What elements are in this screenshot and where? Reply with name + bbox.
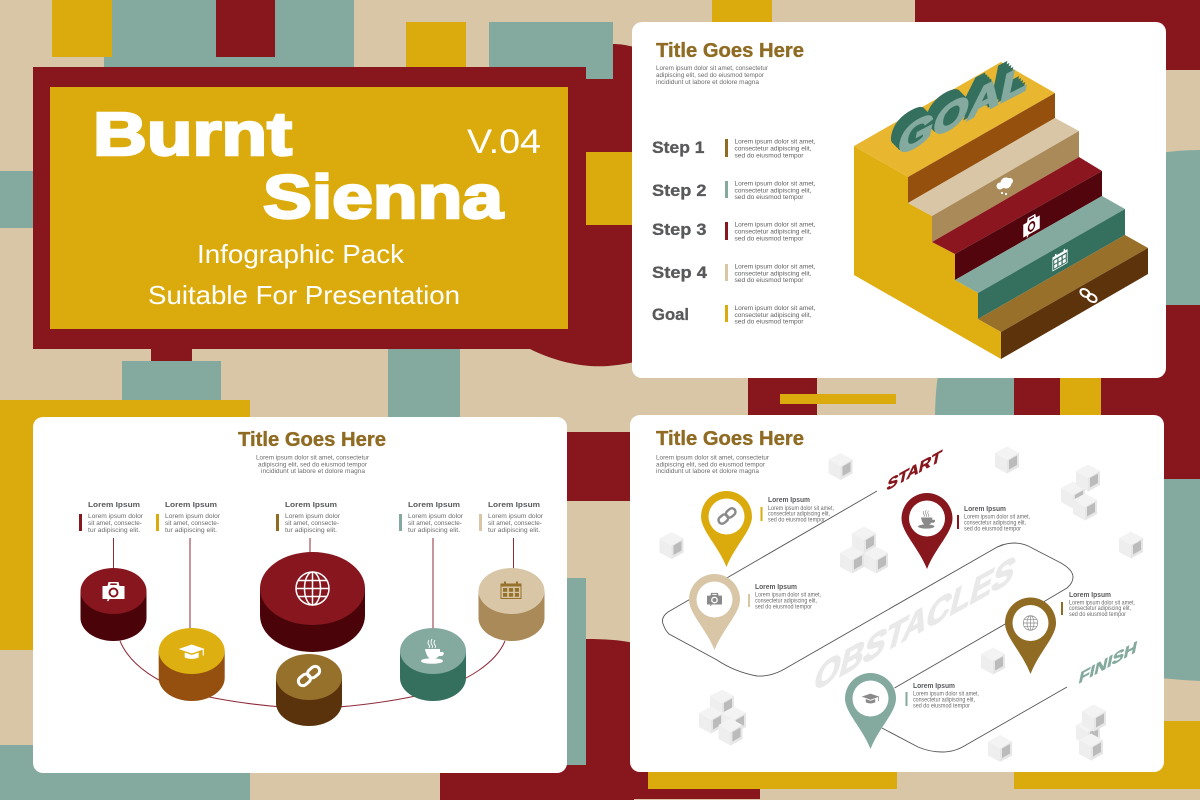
heading: Title Goes Here [656,428,804,450]
caption: brown pin [1061,592,1135,618]
icon: cloud [996,178,1013,195]
pin: red coffee cup [902,493,952,569]
cylinder: globe [260,552,365,652]
intro text [656,456,769,475]
goal row: Lorem ipsum dolor sit amet, [734,305,816,312]
caption: brown pin: Lorem ipsum dolor sit amet, [1069,600,1135,606]
column 3 label: tur adipiscing elit. [285,528,337,534]
column 3 label [276,500,340,534]
column 2 label: sit amet, consecte- [165,521,219,527]
column 3 label: sit amet, consecte- [285,521,339,527]
intro text [256,456,369,475]
intro text: adipiscing elit, sed do eiusmod tempor [656,73,764,79]
intro text: Lorem ipsum dolor sit amet, consectetur [656,456,769,462]
step 2 row: consectetur adipiscing elit, [734,188,812,194]
column 5 label: sit amet, consecte- [488,521,542,527]
heading: Title Goes Here [656,40,804,62]
subtitle: infographic pack: Infographic Pack [197,239,405,269]
goal row: sed do eiusmod tempor [734,318,804,326]
step 3 row: Lorem ipsum dolor sit amet, [734,222,816,228]
step 3 row: sed do eiusmod tempor [734,236,804,242]
intro text: Lorem ipsum dolor sit amet, consectetur [656,66,768,72]
caption: red pin: sed do eiusmod tempor [964,526,1021,532]
step 2 row: sed do eiusmod tempor [734,194,804,201]
caption: teal pin: consectetur adipiscing elit, [913,698,975,704]
step 2 row: Lorem ipsum dolor sit amet, [734,180,816,188]
3D GOAL lettering: GOAL [888,47,1028,160]
intro text [656,66,768,86]
caption: teal pin: Lorem Ipsum [913,683,955,690]
column 5 label [479,500,543,534]
panel: stair steps infographic [632,22,1166,378]
caption: brown pin: Lorem Ipsum [1069,592,1111,599]
pin: brown globe [1005,598,1056,674]
step 2 row: Step 2 [652,181,706,200]
3D GOAL lettering: GOAL [892,51,1032,164]
intro text: incididunt ut labore et dolore magna [261,469,366,475]
caption: gold pin: Lorem ipsum dolor sit amet, [768,506,834,512]
step 3 row: Step 3 [652,220,706,239]
column 5 label: Lorem Ipsum [488,500,540,509]
caption: teal pin: sed do eiusmod tempor [913,704,970,710]
caption: beige pin [748,584,821,610]
3D GOAL lettering: GOAL [886,45,1026,158]
icon: calendar on step [1052,247,1068,272]
column 5 label: tur adipiscing elit. [488,528,540,534]
heading: Title Goes Here [238,429,386,451]
column 3 label: Lorem Ipsum [285,500,337,509]
obstacles watermark: OBSTACLES [810,547,1020,701]
finish label: FINISH [1077,637,1139,688]
caption: red pin: consectetur adipiscing elit, [964,520,1026,526]
cylinder: calendar [478,568,544,641]
step 4 row: consectetur adipiscing elit, [734,270,812,278]
cylinder: link [276,654,342,726]
column 4 label [399,500,463,534]
pin: beige camera [689,574,740,650]
column 1 label: sit amet, consecte- [88,521,142,527]
3D GOAL lettering: GOAL [894,53,1034,166]
caption: brown pin: sed do eiusmod tempor [1069,612,1126,618]
caption: beige pin: sed do eiusmod tempor [755,604,812,610]
column 1 label: Lorem Ipsum [88,500,140,509]
column 1 label: tur adipiscing elit. [88,528,140,534]
caption: red pin [957,506,1030,532]
version label: V.04 [467,123,541,161]
step 3 row [652,220,816,242]
intro text: adipiscing elit, sed do eiusmod tempor [656,462,765,468]
column 2 label: Lorem ipsum dolor [165,514,220,520]
caption: beige pin: Lorem Ipsum [755,584,797,591]
step 1 row: Step 1 [652,138,704,157]
panel: hero title card [33,67,586,349]
column 4 label: Lorem ipsum dolor [408,514,463,520]
caption: red pin: Lorem ipsum dolor sit amet, [964,514,1030,520]
step 4 row: sed do eiusmod tempor [734,277,804,284]
cylinder: graduation cap [159,628,225,701]
goal row [652,305,816,326]
column 4 label: Lorem Ipsum [408,500,460,509]
caption: red pin: Lorem Ipsum [964,506,1006,513]
3D GOAL lettering [886,45,1034,166]
step 4 row [652,263,816,284]
icon: link on step [1079,287,1098,304]
isometric staircase [854,45,1148,359]
caption: teal pin [906,683,979,710]
column 2 label: tur adipiscing elit. [165,528,217,534]
panel: route map infographic [630,415,1164,772]
caption: brown pin: consectetur adipiscing elit, [1069,606,1131,612]
step 1 row [652,138,816,160]
connector lines [114,538,514,708]
intro text: Lorem ipsum dolor sit amet, consectetur [256,456,369,462]
cylinder: camera [80,568,146,641]
icon: camera on step [1023,211,1040,240]
intro text: incididunt ut labore et dolore magna [656,80,760,86]
caption: beige pin: Lorem ipsum dolor sit amet, [755,592,821,598]
column 1 label: Lorem ipsum dolor [88,514,143,520]
caption: gold pin: consectetur adipiscing elit, [768,512,830,518]
isometric cubes [660,446,1143,762]
step 2 row [652,180,816,201]
pin: teal graduation cap [845,673,896,749]
title: Burnt: Burnt [93,100,292,168]
column 1 label [79,500,143,534]
title: Sienna: Sienna [263,163,504,231]
goal row: Goal [652,305,689,324]
step 4 row: Lorem ipsum dolor sit amet, [734,264,816,270]
column 3 label: Lorem ipsum dolor [285,514,340,520]
intro text: adipiscing elit, sed do eiusmod tempor [258,462,367,468]
column 2 label [156,500,220,534]
caption: teal pin: Lorem ipsum dolor sit amet, [913,692,979,698]
step 1 row: Lorem ipsum dolor sit amet, [734,138,816,146]
goal row: consectetur adipiscing elit, [734,312,812,319]
caption: gold pin: Lorem Ipsum [768,497,810,504]
start label: START [885,446,944,495]
caption: gold pin [760,497,834,524]
step 1 row: sed do eiusmod tempor [734,152,804,160]
column 4 label: tur adipiscing elit. [408,528,460,534]
cylinder: coffee cup [400,628,466,701]
column 5 label: Lorem ipsum dolor [488,514,543,520]
step 3 row: consectetur adipiscing elit, [734,228,812,236]
route line [662,491,1073,752]
pin: gold link [701,491,752,567]
step 4 row: Step 4 [652,263,708,282]
3D GOAL lettering: GOAL [890,49,1030,162]
column 4 label: sit amet, consecte- [408,521,462,527]
caption: gold pin: sed do eiusmod tempor [768,518,825,524]
caption: beige pin: consectetur adipiscing elit, [755,598,817,604]
intro text: incididunt ut labore et dolore magna [656,469,760,475]
panel: cylinders infographic [33,417,567,773]
step 1 row: consectetur adipiscing elit, [734,146,812,152]
subtitle: suitable for presentation: Suitable For Presentation [148,280,460,310]
column 2 label: Lorem Ipsum [165,500,217,509]
